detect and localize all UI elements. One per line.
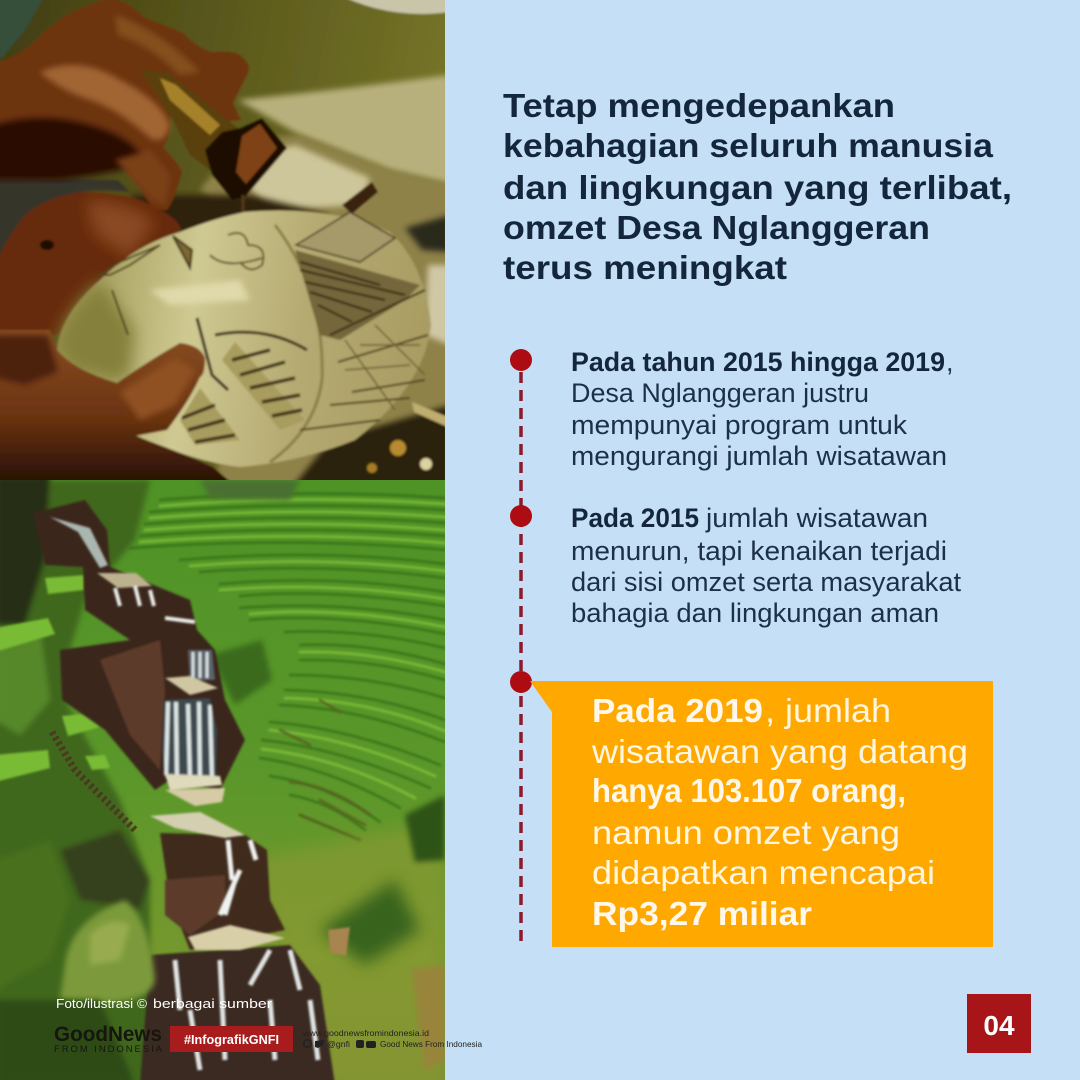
timeline line with dots [510, 349, 532, 943]
heading: kebahagian seluruh manusia [503, 127, 994, 164]
shrub tree [60, 900, 155, 1002]
heading: dan lingkungan yang terlibat, [503, 169, 1012, 206]
text block: 2015 to 2019 program [571, 347, 954, 471]
callout: 2019 result: wisatawan yang datang [591, 733, 968, 770]
text block: 2015 to 2019 program: mengurangi jumlah wisatawan [571, 441, 947, 471]
text block: 2015 to 2019 program: Pada tahun 2015 hingga 2019 [571, 347, 945, 377]
social media links: @gnfi [327, 1039, 350, 1049]
heading: omzet Desa Nglanggeran [503, 209, 930, 246]
logo: GoodNews From Indonesia: FROM INDONESIA [54, 1044, 163, 1055]
shadow behind mask [130, 195, 330, 240]
callout: 2019 result: namun omzet yang [592, 814, 900, 851]
social media links [302, 1028, 482, 1049]
photo credit [56, 996, 273, 1011]
text block: 2015 result: menurun, tapi kenaikan terjadi [571, 536, 947, 566]
text block: 2015 result: jumlah wisatawan [705, 503, 928, 533]
carved mask [57, 211, 431, 467]
upper hand [0, 0, 249, 210]
hashtag badge: #InfografikGNFI [184, 1032, 279, 1047]
text block: 2015 to 2019 program: Desa Nglanggeran justru [571, 378, 869, 408]
text block: 2015 result: bahagia dan lingkungan aman [571, 598, 939, 628]
heading [503, 87, 1012, 286]
social media links: Good News From Indonesia [380, 1039, 482, 1049]
photo: hand painting a batik wooden mask [0, 0, 455, 490]
rice terraces [130, 493, 445, 840]
waterfalls and pools [50, 517, 318, 1070]
text block: 2015 to 2019 program: , [946, 347, 954, 377]
forearm and shirt [0, 192, 182, 335]
callout: 2019 result: Rp3,27 miliar [592, 895, 812, 932]
heading: Tetap mengedepankan [503, 87, 895, 124]
photo: terraced rice fields with waterfall [0, 475, 445, 1080]
page number: 04 [983, 1010, 1015, 1041]
left hillside [0, 475, 165, 1080]
text block: 2015 to 2019 program: mempunyai program untuk [571, 410, 908, 440]
callout: 2019 result: didapatkan mencapai [592, 854, 935, 891]
text block: 2015 result [571, 503, 962, 628]
logo: GoodNews From Indonesia: GoodNews [54, 1023, 162, 1046]
text block: 2015 result: dari sisi omzet serta masyarakat [571, 567, 962, 597]
callout: 2019 result [530, 681, 993, 947]
page number [967, 994, 1031, 1053]
photo credit: Foto/ilustrasi © [56, 996, 147, 1011]
text block: 2015 result: Pada 2015 [571, 503, 699, 533]
callout: 2019 result: hanya 103.107 orang, [592, 772, 906, 809]
photo credit: berbagai sumber [153, 996, 273, 1011]
social media links: www.goodnewsfromindonesia.id [302, 1028, 429, 1038]
heading: terus meningkat [503, 249, 787, 286]
callout: 2019 result: , jumlah [765, 692, 891, 729]
rocks along stream [33, 500, 335, 1080]
canting tool [140, 70, 240, 172]
hashtag badge [170, 1026, 293, 1052]
callout: 2019 result: Pada 2019 [592, 692, 763, 729]
lower hand [0, 330, 240, 490]
